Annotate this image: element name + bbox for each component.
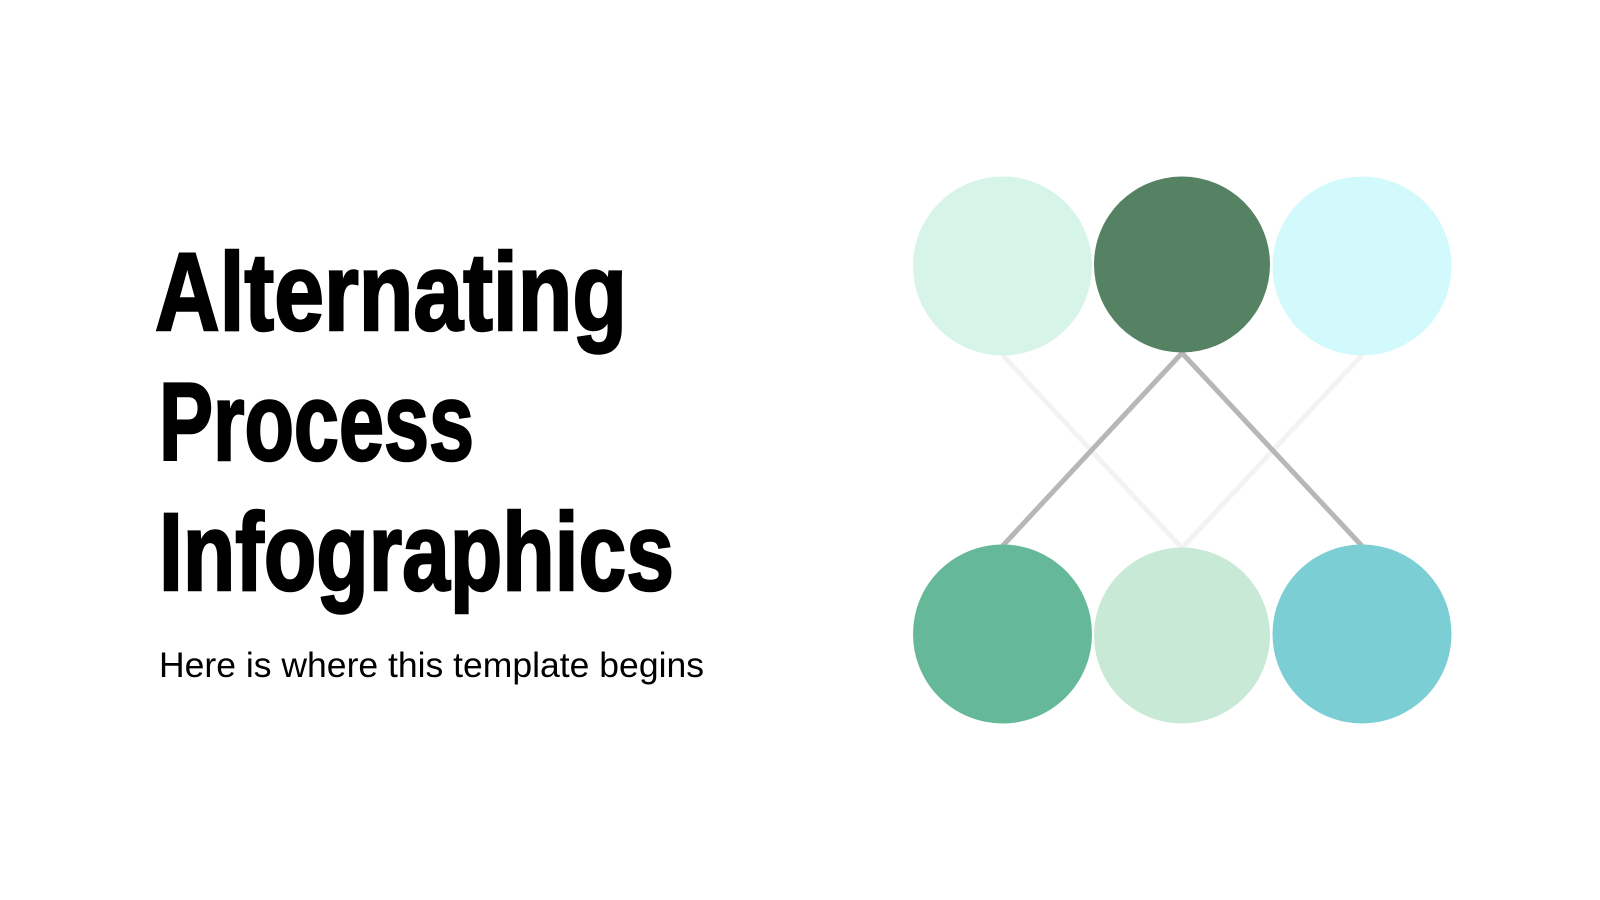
circle: top center bbox=[1094, 176, 1270, 352]
title: Infographics bbox=[159, 491, 674, 614]
circle: bottom left bbox=[913, 544, 1092, 724]
circle: bottom center bbox=[1094, 548, 1270, 724]
circle: top left bbox=[913, 176, 1092, 356]
dark connector lines bbox=[1002, 353, 1362, 546]
circle: top right bbox=[1272, 176, 1452, 356]
title bbox=[155, 231, 674, 614]
subtitle: Here is where this template begins bbox=[159, 645, 704, 685]
diagram: alternating process bbox=[913, 176, 1452, 724]
title: Process bbox=[159, 361, 474, 484]
faint connector lines bbox=[1002, 355, 1362, 548]
title: Alternating bbox=[155, 231, 627, 354]
circle: bottom right bbox=[1272, 544, 1452, 724]
